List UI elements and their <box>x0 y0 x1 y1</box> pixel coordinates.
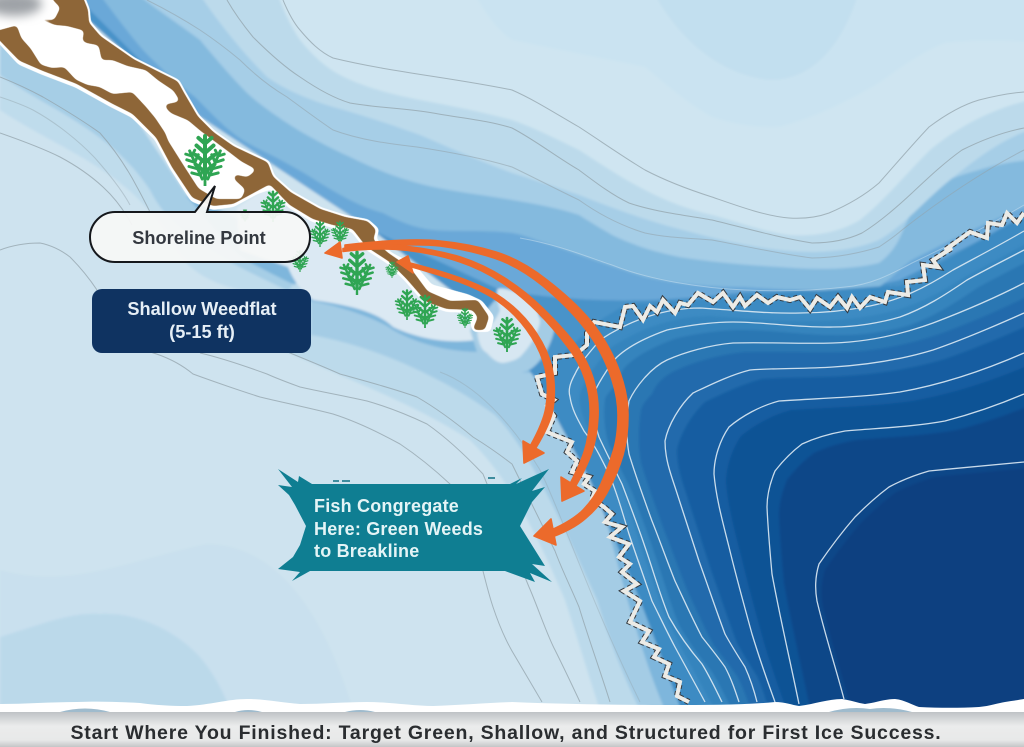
callout: Shoreline Point <box>90 186 310 262</box>
depth bands: deep basin <box>579 228 1024 747</box>
label: Shallow Weedflat: (5-15 ft) <box>169 322 235 342</box>
arrow: middle arc <box>343 245 598 501</box>
arrow: outer arc <box>325 240 628 545</box>
banner: Fish Congregate Here: Here: Green Weeds <box>314 519 483 539</box>
weed beds <box>183 136 522 352</box>
footer: snow edge and caption bar: Start Where You Finished: Target Green, Shallow, and Structured for First Ice Success. <box>70 722 942 744</box>
arrow: inner arc <box>397 256 554 463</box>
banner: Fish Congregate Here: to Breakline <box>314 541 419 561</box>
shoreline point: land spit with snow <box>0 0 491 329</box>
label: Shallow Weedflat: Shallow Weedflat <box>127 299 277 319</box>
footer: snow edge and caption bar <box>0 699 1024 747</box>
banner: Fish Congregate Here <box>278 469 552 582</box>
contour lines: deep water <box>569 231 1024 704</box>
banner: Fish Congregate Here: Fish Congregate <box>314 496 459 516</box>
orange arrows: green weeds to breakline <box>325 240 628 545</box>
label: Shallow Weedflat <box>92 289 311 353</box>
breakline: jagged ice edge <box>537 213 1024 702</box>
callout: Shoreline Point: Shoreline Point <box>132 228 266 248</box>
snow cloud at top-left corner <box>0 0 42 16</box>
contour line: faint light line north of the breakline <box>520 205 1024 291</box>
